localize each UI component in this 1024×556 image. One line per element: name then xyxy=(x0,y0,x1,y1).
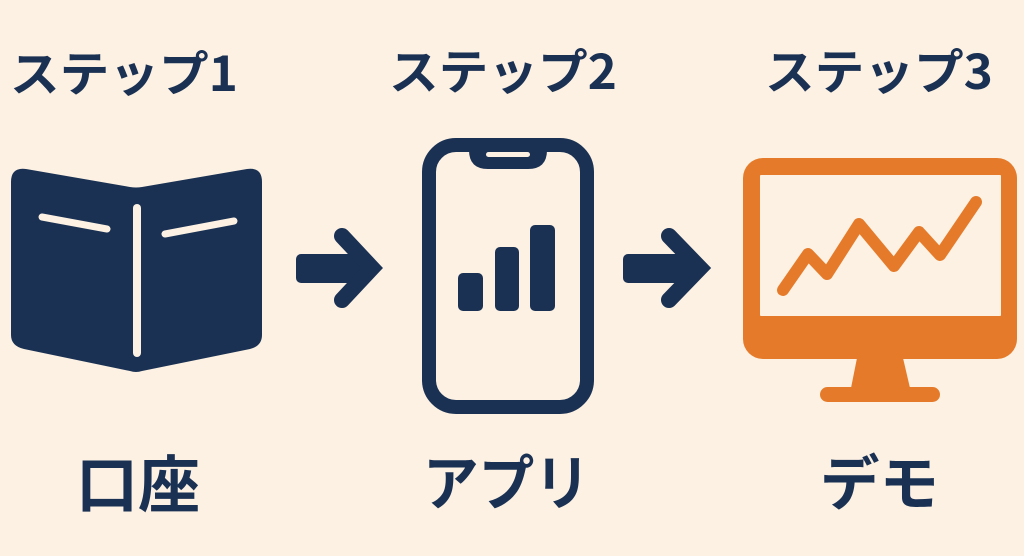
label: account: 口座 xyxy=(76,435,200,525)
icon: smartphone with bar chart xyxy=(429,145,587,407)
icon: open book xyxy=(11,169,262,372)
heading: step 2: ステップ2 xyxy=(389,33,617,103)
arrow: step 1 to step 2 xyxy=(296,236,372,300)
icon: monitor with line chart xyxy=(743,158,1017,402)
heading: step 1: ステップ1 xyxy=(10,35,238,105)
label: app: アプリ xyxy=(423,436,590,523)
label: demo: デモ xyxy=(820,436,939,523)
heading: step 3: ステップ3 xyxy=(765,33,993,103)
arrow: step 2 to step 3 xyxy=(623,236,700,300)
